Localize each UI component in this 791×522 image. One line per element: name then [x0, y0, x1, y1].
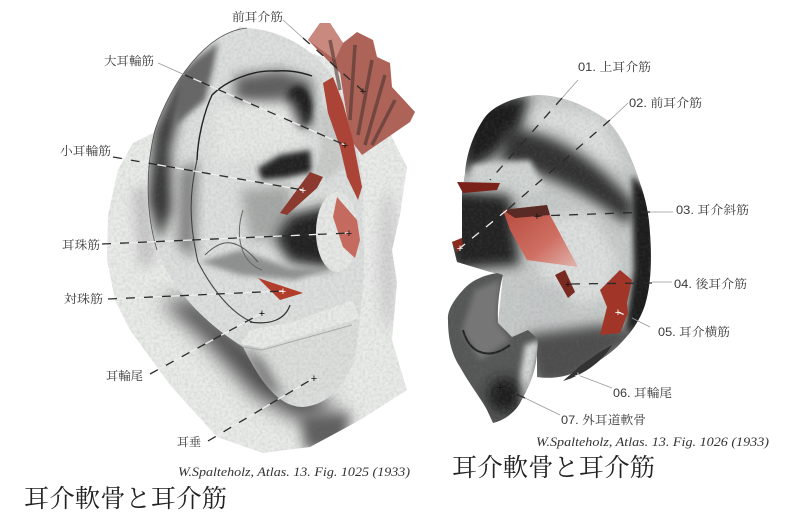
labels: left figure: 前耳介筋 — [232, 10, 283, 24]
surrounding tissue — [100, 20, 420, 460]
muscle: tragicus — [333, 197, 360, 258]
labels: left figure: 対珠筋 — [64, 291, 103, 306]
muscle: oblique — [503, 205, 578, 267]
title: right: 耳介軟骨と耳介筋 — [452, 448, 655, 484]
labels: right figure — [561, 59, 749, 427]
title: left: 耳介軟骨と耳介筋 — [24, 479, 227, 515]
muscle: helicis major — [323, 77, 362, 200]
cross markers: + — [565, 279, 571, 291]
fold lines — [148, 28, 352, 350]
cross markers: + — [360, 86, 366, 98]
cross markers: + — [346, 228, 352, 240]
leader lines — [102, 20, 673, 441]
helix tail — [563, 345, 612, 381]
cross markers: + — [534, 211, 540, 223]
muscle: anterior stub — [452, 238, 463, 252]
labels: right figure: 07. 外耳道軟骨 — [561, 412, 646, 427]
auricular cartilage body — [450, 90, 655, 385]
labels: left figure: 耳珠筋 — [62, 237, 100, 252]
labels: left figure: 耳輪尾 — [106, 368, 143, 383]
muscle: transverse — [600, 270, 632, 335]
muscle: superior stub — [457, 182, 500, 193]
cross markers: + — [300, 185, 306, 197]
labels: right figure: 03. 耳介斜筋 — [676, 202, 749, 217]
cross markers: + — [311, 373, 317, 385]
cross markers: + — [259, 308, 265, 320]
right figure: cranial surface of cartilage — [445, 90, 655, 425]
cross markers: + — [457, 243, 463, 255]
labels: left figure: 大耳輪筋 — [104, 53, 154, 68]
cross markers: + — [575, 370, 581, 382]
cross markers: + — [615, 307, 621, 319]
labels: left figure: 小耳輪筋 — [60, 143, 111, 158]
cross markers: + — [497, 382, 503, 394]
muscle: antitragicus — [258, 278, 303, 300]
labels: left figure: 耳垂 — [177, 435, 201, 449]
tragal cartilage — [445, 270, 540, 425]
left figure: external ear with muscles — [100, 20, 420, 460]
labels: right figure: 01. 上耳介筋 — [578, 59, 651, 74]
muscle: anterior auricular fan — [308, 23, 415, 155]
cross markers: + — [280, 286, 286, 298]
labels: right figure: 04. 後耳介筋 — [674, 277, 747, 291]
labels: right figure: 02. 前耳介筋 — [629, 96, 702, 110]
labels: right figure: 06. 耳輪尾 — [613, 385, 672, 400]
cross markers — [259, 86, 621, 394]
labels: right figure: 05. 耳介横筋 — [658, 324, 730, 339]
muscle: helicis minor — [280, 172, 323, 215]
ear cartilage shading — [148, 28, 364, 407]
labels: left figure — [60, 10, 283, 449]
credit: left figure: W.Spalteholz, Atlas. 13. Fig. 1025 (1933) — [178, 464, 410, 479]
cross markers: + — [342, 140, 348, 152]
credit: right figure: W.Spalteholz, Atlas. 13. Fig. 1026 (1933) — [536, 434, 769, 449]
muscle: posterior stub — [555, 270, 575, 298]
